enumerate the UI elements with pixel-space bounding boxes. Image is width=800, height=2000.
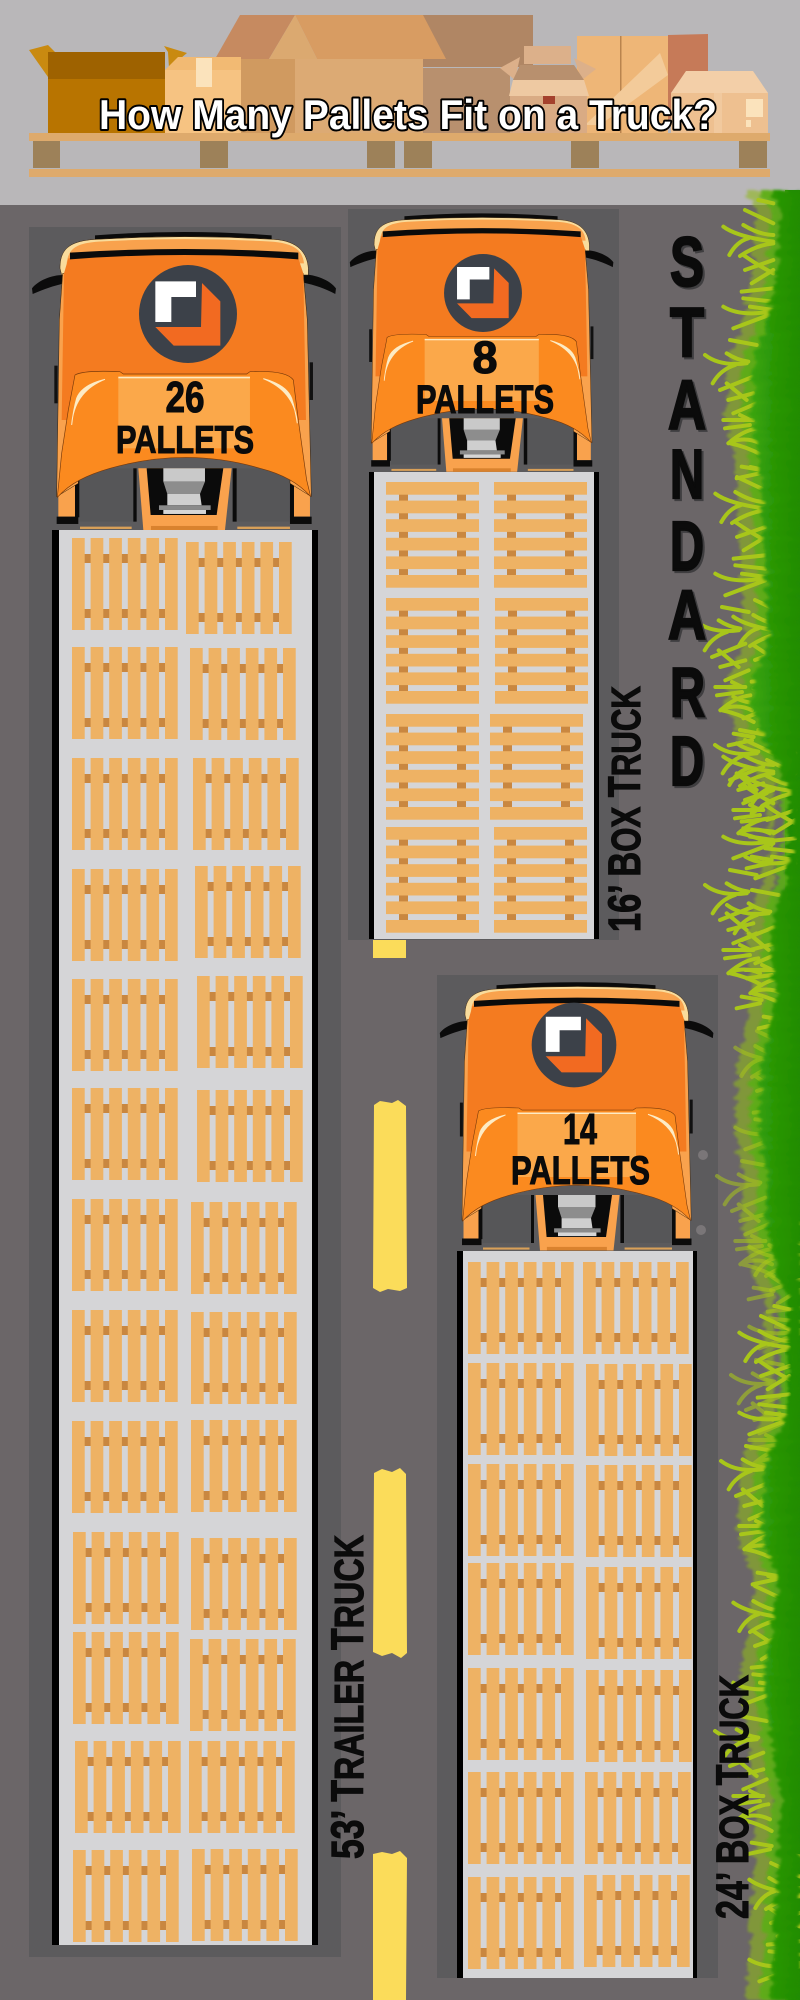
faint road marks (696, 1150, 708, 1235)
label: 53' trailer truck: 53’ TRAILER TRUCK (322, 1535, 373, 1859)
road centre dashes (373, 940, 407, 2000)
label: 16' box truck: 16’ BOX TRUCK (599, 686, 650, 932)
26 pallets (72, 538, 303, 1942)
logo (139, 265, 237, 363)
count: 8 pallets: 8 (472, 332, 498, 383)
header pallet with boxes (29, 15, 770, 177)
label: STANDARD vertical heading: R (670, 653, 705, 731)
count: 8 pallets: PALLETS (416, 378, 554, 422)
count: 14 pallets: 14 (563, 1105, 597, 1154)
background: grey header band (0, 0, 800, 205)
pallet deck (29, 133, 770, 177)
count: 26 pallets: PALLETS (116, 419, 254, 462)
count: 14 pallets (511, 1105, 650, 1193)
count: 26 pallets (116, 373, 254, 462)
8 pallets (386, 482, 588, 933)
count: 14 pallets: PALLETS (511, 1149, 650, 1193)
logo (532, 1003, 616, 1087)
label: STANDARD vertical heading: A (668, 366, 706, 444)
label: STANDARD vertical heading: S (670, 223, 704, 301)
orange open box (29, 45, 187, 133)
cab (32, 232, 336, 530)
label: STANDARD vertical heading: D (670, 722, 704, 800)
truck 3: 24 foot box (440, 982, 713, 1978)
label: STANDARD vertical heading: A (668, 576, 706, 654)
logo (444, 254, 522, 332)
label: STANDARD vertical heading: D (670, 507, 704, 585)
small open box (500, 46, 596, 133)
14 pallets (468, 1262, 692, 1969)
count: 8 pallets (416, 332, 554, 422)
label: STANDARD vertical heading: T (670, 293, 704, 371)
title: How Many Pallets Fit on a Truck? (99, 91, 717, 138)
panel: truck 2 shadow (348, 209, 619, 940)
count: 26 pallets: 26 (166, 373, 204, 422)
right small box (671, 71, 768, 133)
grass verge (697, 190, 800, 2000)
tall box (577, 34, 708, 133)
trailer bed (369, 472, 599, 939)
trailer bed (52, 530, 318, 1945)
truck 2: 16 foot box (350, 213, 613, 939)
label: STANDARD vertical heading: N (670, 435, 704, 513)
label: 24' box truck: 24’ BOX TRUCK (707, 1675, 758, 1919)
cab (440, 982, 713, 1250)
cab (350, 213, 613, 472)
panel: truck 1 shadow (29, 227, 341, 1957)
label: STANDARD vertical heading (668, 223, 706, 800)
small light box (165, 57, 241, 133)
panel: truck 3 shadow (437, 975, 718, 1978)
large cardboard box (215, 15, 533, 133)
trailer bed (457, 1251, 697, 1978)
truck 1: 53 foot trailer (32, 232, 336, 1945)
